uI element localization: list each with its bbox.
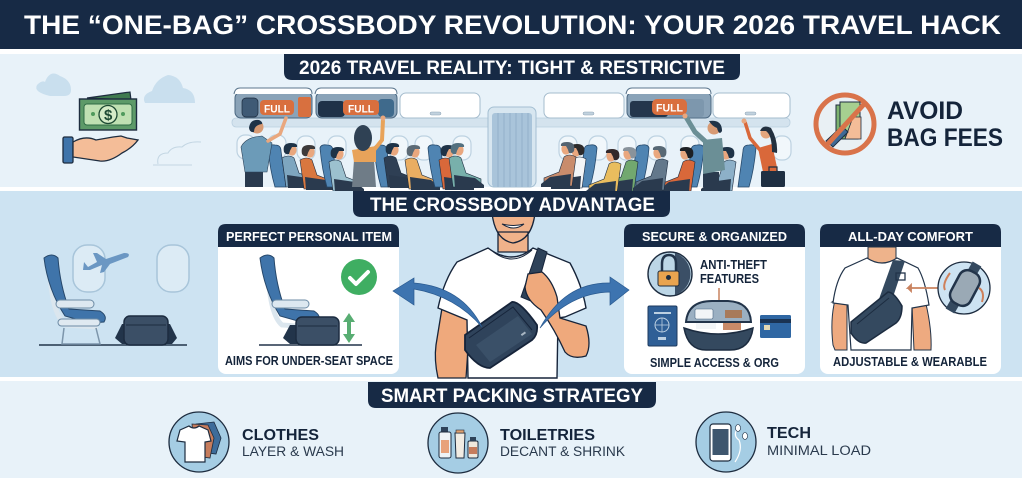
left arm [435,308,470,378]
card: secure and organized: FEATURES [700,271,759,286]
item: toiletries [428,413,625,473]
windows [237,135,791,160]
illustration: seat and bag [39,245,189,345]
item: clothes [169,412,344,472]
arrow: to personal item [393,278,482,327]
icon: bottles [428,413,488,473]
door [488,107,536,187]
standing man left [241,118,286,187]
bin: full 5: FULL [656,102,683,114]
right arm and hand [525,272,589,357]
card: all-day comfort: ALL-DAY COMFORT [848,229,973,244]
passengers left [268,143,484,192]
item: clothes: CLOTHES [242,427,319,444]
icon: plane [83,253,129,273]
icon: height arrow [343,313,355,343]
item: tech: MINIMAL LOAD [767,443,871,458]
icon: open bag [684,301,753,350]
icon: hand holding money [63,92,138,163]
seat [44,255,105,344]
card: all-day comfort: ADJUSTABLE & WEARABLE [833,355,987,369]
illustration: crowded cabin [228,87,794,194]
bin: full 1: FULL [264,104,290,116]
pointer line [718,288,720,308]
heading: crossbody advantage: THE CROSSBODY ADVANTAGE [370,195,655,216]
seat and bag under seat [259,255,362,345]
icon: strap detail [938,262,990,314]
text: avoid bag fees: AVOID [887,97,963,125]
bin: empty 6 [713,93,790,118]
card: perfect personal item: AIMS FOR UNDER-SEAT SPACE [225,354,393,368]
card: perfect personal item [218,224,399,374]
card: secure and organized: ANTI-THEFT [700,257,767,272]
card: secure and organized [624,224,805,374]
card: perfect personal item: PERFECT PERSONAL ITEM [226,229,392,244]
icon: phone and earbuds [696,412,756,472]
title bar: THE “ONE-BAG” CROSSBODY REVOLUTION: YOUR 2026 TRAVEL HACK [24,10,1002,40]
arrow: to secure and organized [540,277,629,328]
title bar [0,0,1022,49]
panel: 2026 travel reality [0,54,1022,194]
illustration: smiling man with crossbody bag [435,213,589,378]
heading: smart packing strategy: SMART PACKING STRATEGY [381,386,643,407]
icon: green check [341,259,377,295]
icon: credit card [760,315,791,338]
item: toiletries: TOILETRIES [500,427,595,444]
cabin wall [228,87,794,187]
item: clothes: LAYER & WASH [242,444,344,459]
bin: full 5 [626,88,711,118]
strap [521,248,547,302]
item: tech: TECH [767,425,811,442]
item: toiletries: DECANT & SHRINK [500,444,625,459]
text: avoid bag fees: BAG FEES [887,124,1003,152]
icon: hand holding money: $ [104,107,113,124]
bag [115,316,177,345]
card: secure and organized: SIMPLE ACCESS & ORG [650,356,779,370]
bag [465,302,537,368]
neck and face [492,213,535,252]
standing woman with briefcase [742,118,785,187]
bin: full 2: FULL [348,104,374,116]
item: tech [696,412,871,472]
bin: empty 3 [400,93,480,118]
passengers right [541,142,756,194]
standing man right [682,114,725,187]
floor [39,344,187,346]
bin: full 1 [234,88,312,118]
panel: smart packing strategy [0,381,1022,478]
icon: no money [816,95,874,153]
icon: background clouds [24,74,201,165]
standing woman left [352,116,386,187]
panel: crossbody advantage [0,191,1022,378]
pointer arrow [908,285,938,291]
heading: 2026 travel reality: 2026 TRAVEL REALITY: TIGHT & RESTRICTIVE [299,58,725,79]
windows [73,245,189,292]
bin: full 2 [315,88,397,118]
icon: passport [648,306,677,346]
shirt [438,248,586,378]
text: avoid bag fees [887,97,1003,152]
bin: empty 4 [544,93,624,118]
card: all-day comfort [820,224,1001,374]
person wearing bag [832,247,931,350]
icon: padlock [648,252,692,296]
icon: shirts [169,412,229,472]
card: secure and organized: SECURE & ORGANIZED [642,229,787,244]
overhead rail [232,118,790,127]
